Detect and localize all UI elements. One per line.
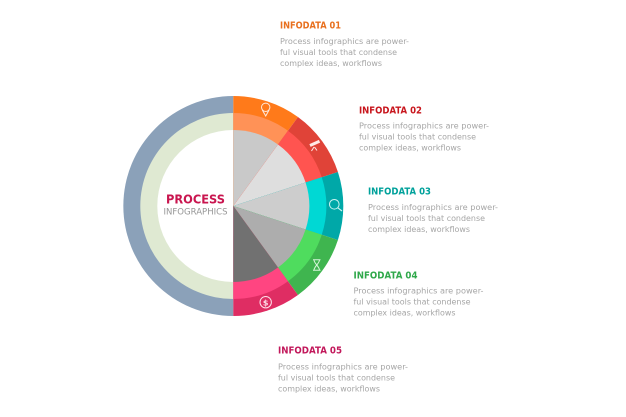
segment 05 pink [233,206,298,316]
icon: light bulb pin [262,103,270,116]
left half inner ring [140,113,233,299]
icon: magnifying glass [330,200,342,211]
segment 03 teal [233,172,343,240]
circular process diagram [123,96,343,316]
text block: infodata 05: INFODATA 05 [278,346,342,357]
text block: infodata 02: Process infographics are power- [359,120,489,130]
text block: infodata 02: INFODATA 02 [359,106,422,116]
icon: dollar coin: $ [263,298,269,307]
text block: infodata 01: Process infographics are power- [280,36,409,46]
text block: infodata 04: Process infographics are power- [354,285,484,295]
text block: infodata 03: INFODATA 03 [368,187,431,198]
text block: infodata 03: complex ideas, workflows [368,224,470,234]
text block: infodata 04: complex ideas, workflows [354,307,456,317]
left half white centre [157,130,233,282]
text block: infodata 01 [280,20,409,68]
centre title: PROCESS [166,192,225,206]
icon: dollar coin [260,296,271,308]
icon: hourglass [313,260,320,270]
text block: infodata 03 [368,187,498,234]
text block: infodata 04: INFODATA 04 [354,270,418,281]
text block: infodata 05: complex ideas, workflows [278,383,380,393]
text block: infodata 05: ful visual tools that condense [278,372,395,382]
segment 02 red [233,117,338,206]
left half outer ring [123,96,233,316]
segment 04 green [233,206,338,295]
text block: infodata 05: Process infographics are power- [278,361,408,371]
text block: infodata 01: INFODATA 01 [280,20,341,32]
segment 01 orange [233,96,298,206]
text block: infodata 05 [278,346,408,393]
centre title: INFOGRAPHICS [164,208,228,218]
text block: infodata 04: ful visual tools that condense [354,296,470,306]
text block: infodata 02 [359,106,489,152]
text block: infodata 03: Process infographics are power- [368,202,498,212]
text block: infodata 03: ful visual tools that condense [368,213,485,223]
text block: infodata 01: ful visual tools that condense [280,47,397,57]
text block: infodata 01: complex ideas, workflows [280,58,382,68]
icon: telescope [310,141,320,151]
text block: infodata 02: ful visual tools that condense [359,132,476,142]
centre title [164,192,228,218]
text block: infodata 04 [354,270,484,317]
text block: infodata 02: complex ideas, workflows [359,142,461,152]
